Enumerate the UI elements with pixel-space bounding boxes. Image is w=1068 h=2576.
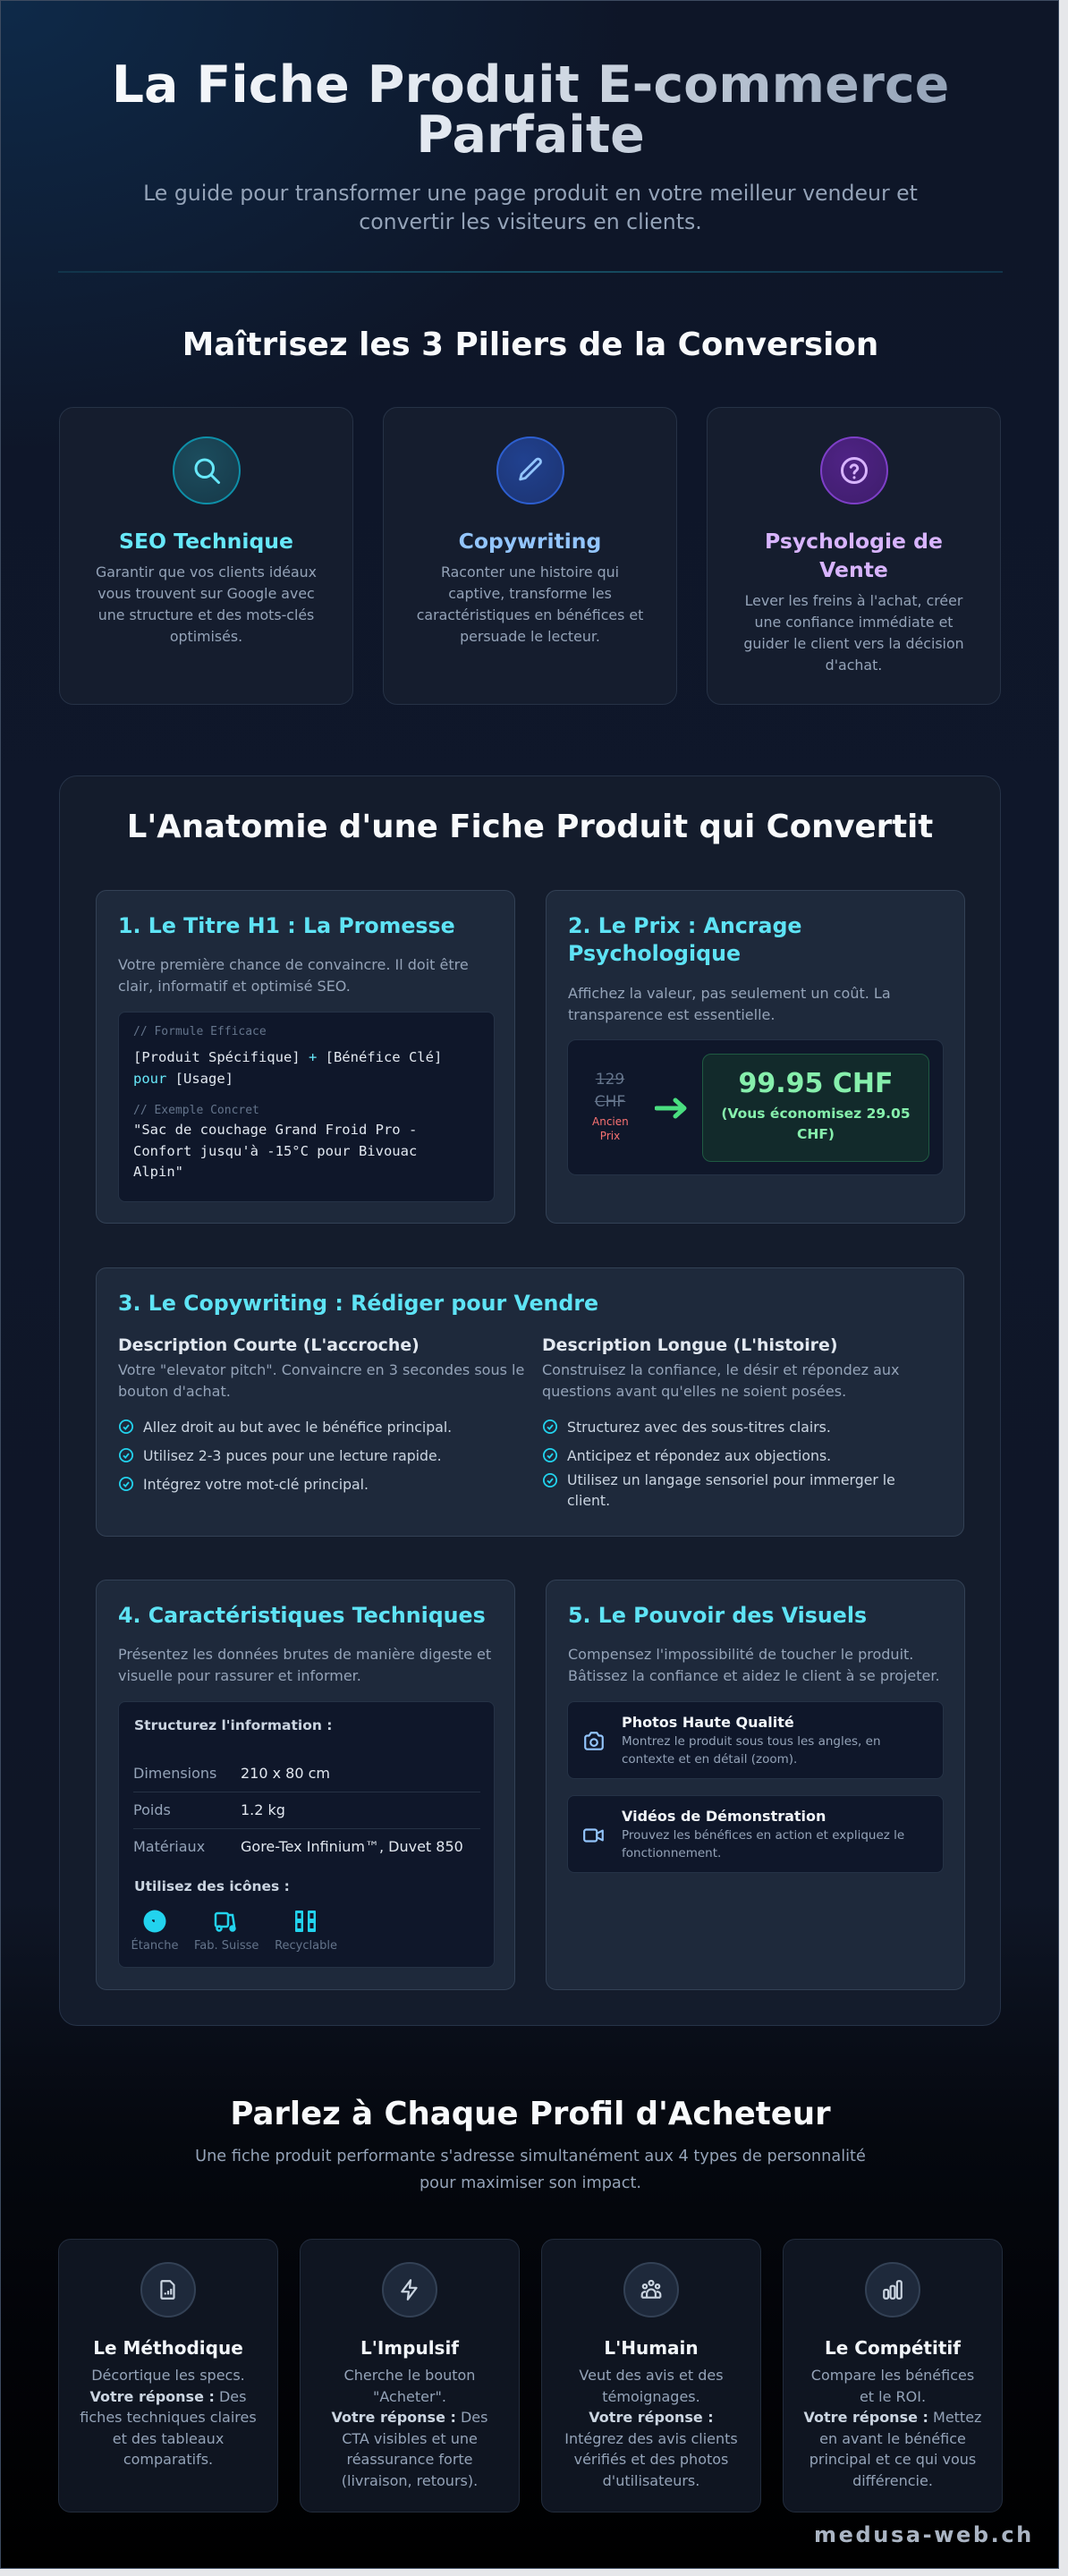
text: fiches techniques claires — [80, 2409, 257, 2426]
heading: 4. Caractéristiques Techniques — [118, 1603, 486, 1628]
heading: 2. Le Prix : Ancrage — [568, 913, 801, 938]
heading: SEO Technique — [119, 529, 293, 554]
spec table: 1.2 kg — [241, 1801, 285, 1818]
text — [803, 2367, 981, 2489]
text: Bâtissez la confiance et aidez le client à se projeter. — [568, 1667, 940, 1684]
panel: competitif — [783, 2239, 1003, 2512]
column: description longue: Construisez la confiance, le désir et répondez aux — [542, 1361, 900, 1378]
text: guider le client vers la décision — [743, 635, 964, 652]
column: description longue: Structurez avec des sous-titres clairs. — [567, 1419, 831, 1435]
icon: recyclable: Recyclable — [275, 1939, 337, 1953]
panel: Copywriting — [383, 407, 677, 705]
icon: question — [819, 436, 887, 504]
column: description courte — [118, 1335, 524, 1492]
heading: Le Méthodique — [93, 2337, 243, 2359]
text — [80, 2367, 257, 2468]
code box — [118, 1012, 495, 1202]
spec table: Dimensions — [133, 1765, 216, 1782]
icon: recyclable — [275, 1911, 337, 1953]
text: Compare les bénéfices — [811, 2367, 974, 2384]
item: videos: fonctionnement. — [622, 1846, 721, 1860]
icon: etanche: Étanche — [131, 1939, 178, 1953]
panel: Psychologie — [707, 407, 1001, 705]
text: Votre réponse : Des — [89, 2388, 246, 2405]
heading: L'Impulsif — [360, 2337, 459, 2359]
icon: document chart — [140, 2262, 196, 2318]
new price: CHF) — [797, 1126, 835, 1142]
text: vous trouvent sur Google avec — [97, 585, 315, 602]
code box: Alpin" — [133, 1164, 183, 1180]
brand footer: medusa-web.ch — [814, 2522, 1034, 2547]
icon: etanche — [131, 1911, 178, 1953]
price box — [567, 1039, 944, 1175]
text: Décortique les specs. — [91, 2367, 245, 2384]
column: description courte: Description Courte (L'accroche) — [118, 1335, 420, 1355]
icon: fab suisse: Fab. Suisse — [194, 1939, 259, 1953]
text: Affichez la valeur, pas seulement un coût. La — [568, 985, 891, 1002]
subtitle: profils: pour maximiser son impact. — [420, 2174, 641, 2192]
text: Garantir que vos clients idéaux — [96, 564, 317, 580]
heading: anatomy: L'Anatomie d'une Fiche Produit qui Convertit — [127, 809, 933, 845]
card 1: titre H1 — [96, 890, 515, 1224]
text — [96, 564, 317, 645]
text: Veut des avis et des — [579, 2367, 724, 2384]
heading: Psychologie de — [765, 529, 943, 554]
text: visuelle pour rassurer et informer. — [118, 1667, 361, 1684]
text — [568, 1646, 940, 1684]
column: description courte: Votre "elevator pitch". Convaincre en 3 secondes sous le — [118, 1361, 524, 1378]
title: Parfaite — [416, 106, 645, 165]
text: vérifiés et des photos — [574, 2451, 728, 2468]
heading: Copywriting — [459, 529, 601, 554]
card 3: copywriting — [96, 1267, 964, 1537]
icon: camera — [584, 1732, 604, 1750]
heading: L'Humain — [604, 2337, 699, 2359]
heading: Psychologique — [568, 941, 741, 966]
heading: 1. Le Titre H1 : La Promesse — [118, 913, 455, 938]
code box: // Formule Efficace — [133, 1025, 267, 1038]
title — [112, 55, 949, 165]
item: photos: Montrez le produit sous tous les angles, en — [622, 1734, 881, 1749]
panel: methodique — [58, 2239, 278, 2512]
heading: 5. Le Pouvoir des Visuels — [568, 1603, 867, 1628]
text: caractéristiques en bénéfices et — [417, 606, 643, 623]
item: photos: contexte et en détail (zoom). — [622, 1752, 797, 1767]
specs box — [118, 1701, 495, 1968]
icon: search — [172, 436, 240, 504]
text: en avant le bénéfice — [819, 2430, 966, 2447]
arrow — [655, 1098, 687, 1118]
text: et le ROI. — [860, 2388, 926, 2405]
text — [118, 956, 469, 995]
text: témoignages. — [602, 2388, 700, 2405]
panel: impulsif — [300, 2239, 520, 2512]
text: Cherche le bouton — [344, 2367, 475, 2384]
spec table — [133, 1765, 480, 1855]
column: description courte: Utilisez 2-3 puces pour une lecture rapide. — [143, 1447, 442, 1463]
spec table: Gore-Tex Infinium™, Duvet 850 — [241, 1837, 463, 1855]
heading — [568, 913, 801, 966]
subtitle — [143, 181, 918, 234]
item: videos: Prouvez les bénéfices en action et expliquez le — [622, 1828, 904, 1843]
text: Votre réponse : Des — [331, 2409, 487, 2426]
text: persuade le lecteur. — [460, 628, 600, 645]
new price: (Vous économisez 29.05 — [721, 1106, 911, 1122]
text: optimisés. — [170, 628, 242, 645]
code box: // Exemple Concret — [133, 1104, 259, 1117]
text: principal et ce qui vous — [809, 2451, 976, 2468]
text — [743, 592, 964, 674]
column: description longue: Description Longue (L'histoire) — [542, 1335, 837, 1355]
code box: "Sac de couchage Grand Froid Pro - — [133, 1122, 417, 1138]
card 4: caracteristiques — [96, 1580, 515, 1990]
text: clair, informatif et optimisé SEO. — [118, 977, 351, 995]
item: videos — [567, 1795, 944, 1873]
code box: [Produit Spécifique] + [Bénéfice Clé] — [133, 1049, 442, 1065]
spec heading: Structurez l'information : — [134, 1717, 333, 1733]
icon: lightning — [382, 2262, 437, 2318]
subtitle: convertir les visiteurs en clients. — [359, 209, 702, 234]
text: d'achat. — [826, 657, 882, 674]
card 2: prix — [546, 890, 965, 1224]
text: Votre réponse : — [589, 2409, 714, 2426]
icon: fab suisse — [194, 1912, 259, 1953]
text: transparence est essentielle. — [568, 1005, 775, 1023]
text: Raconter une histoire qui — [441, 564, 619, 580]
old price: Prix — [600, 1130, 620, 1142]
text — [568, 985, 891, 1023]
text: Votre réponse : Mettez — [804, 2409, 981, 2426]
heading: pillars: Maîtrisez les 3 Piliers de la Conversion — [182, 326, 878, 363]
text: "Acheter". — [373, 2388, 446, 2405]
old price: CHF — [595, 1093, 625, 1111]
text: d'utilisateurs. — [603, 2472, 699, 2489]
item: photos: Photos Haute Qualité — [622, 1714, 794, 1731]
text: Intégrez des avis clients — [564, 2430, 738, 2447]
code box: Confort jusqu'à -15°C pour Bivouac — [133, 1143, 417, 1159]
column: description courte: Intégrez votre mot-clé principal. — [143, 1476, 369, 1492]
text: Votre première chance de convaincre. Il doit être — [118, 956, 469, 973]
text — [331, 2367, 487, 2489]
text: Compensez l'impossibilité de toucher le produit. — [568, 1646, 913, 1663]
item: videos: Vidéos de Démonstration — [622, 1808, 826, 1825]
code box: pour [Usage] — [133, 1070, 233, 1086]
panel: SEO Technique — [59, 407, 353, 705]
spec table: Matériaux — [133, 1837, 205, 1855]
item: photos — [567, 1701, 944, 1779]
heading — [765, 529, 943, 582]
icon: pencil — [496, 436, 564, 504]
subtitle: profils — [195, 2148, 866, 2192]
new price: 99.95 CHF — [739, 1068, 893, 1099]
new price — [702, 1054, 929, 1162]
heading: profils: Parlez à Chaque Profil d'Acheteur — [230, 2096, 831, 2132]
icons heading: Utilisez des icônes : — [134, 1878, 290, 1894]
text: captive, transforme les — [448, 585, 612, 602]
column: description courte: bouton d'achat. — [118, 1383, 231, 1399]
subtitle: Le guide pour transformer une page produit en votre meilleur vendeur et — [143, 181, 918, 206]
card 5: visuels — [546, 1580, 965, 1990]
icon: video — [583, 1828, 604, 1843]
column: description courte: Allez droit au but avec le bénéfice principal. — [143, 1419, 452, 1435]
text — [417, 564, 643, 645]
text: CTA visibles et une — [342, 2430, 478, 2447]
subtitle: profils: Une fiche produit performante s'adresse simultanément aux 4 types de personnalité — [195, 2148, 866, 2165]
text: réassurance forte — [346, 2451, 473, 2468]
text: différencie. — [852, 2472, 933, 2489]
spec table: Poids — [133, 1801, 171, 1818]
text — [118, 1646, 491, 1684]
panel: humain — [541, 2239, 761, 2512]
column: description longue: client. — [567, 1492, 610, 1509]
column: description longue: questions avant qu'elles ne soient posées. — [542, 1383, 846, 1399]
text: une structure et des mots-clés — [98, 606, 314, 623]
column: description longue: Utilisez un langage sensoriel pour immerger le — [567, 1471, 895, 1488]
spec table: 210 x 80 cm — [241, 1765, 330, 1782]
text: Lever les freins à l'achat, créer — [745, 592, 962, 609]
text: et des tableaux — [113, 2430, 224, 2447]
heading: 3. Le Copywriting : Rédiger pour Vendre — [118, 1291, 598, 1316]
column: description longue — [542, 1335, 900, 1509]
icon: group — [623, 2262, 679, 2318]
column: description longue: Anticipez et répondez aux objections. — [567, 1447, 831, 1463]
text: comparatifs. — [123, 2451, 213, 2468]
heading: Vente — [819, 557, 888, 582]
title: La Fiche Produit E-commerce — [112, 55, 949, 114]
heading: Le Compétitif — [825, 2337, 961, 2359]
old price: Ancien — [592, 1115, 629, 1128]
old price — [592, 1071, 629, 1142]
text — [564, 2367, 738, 2489]
old price: 129 — [596, 1071, 624, 1089]
text: Présentez les données brutes de manière digeste et — [118, 1646, 491, 1663]
text: (livraison, retours). — [342, 2472, 478, 2489]
panel: anatomy — [59, 775, 1001, 2026]
icon: bar chart — [865, 2262, 920, 2318]
text: une confiance immédiate et — [754, 614, 954, 631]
